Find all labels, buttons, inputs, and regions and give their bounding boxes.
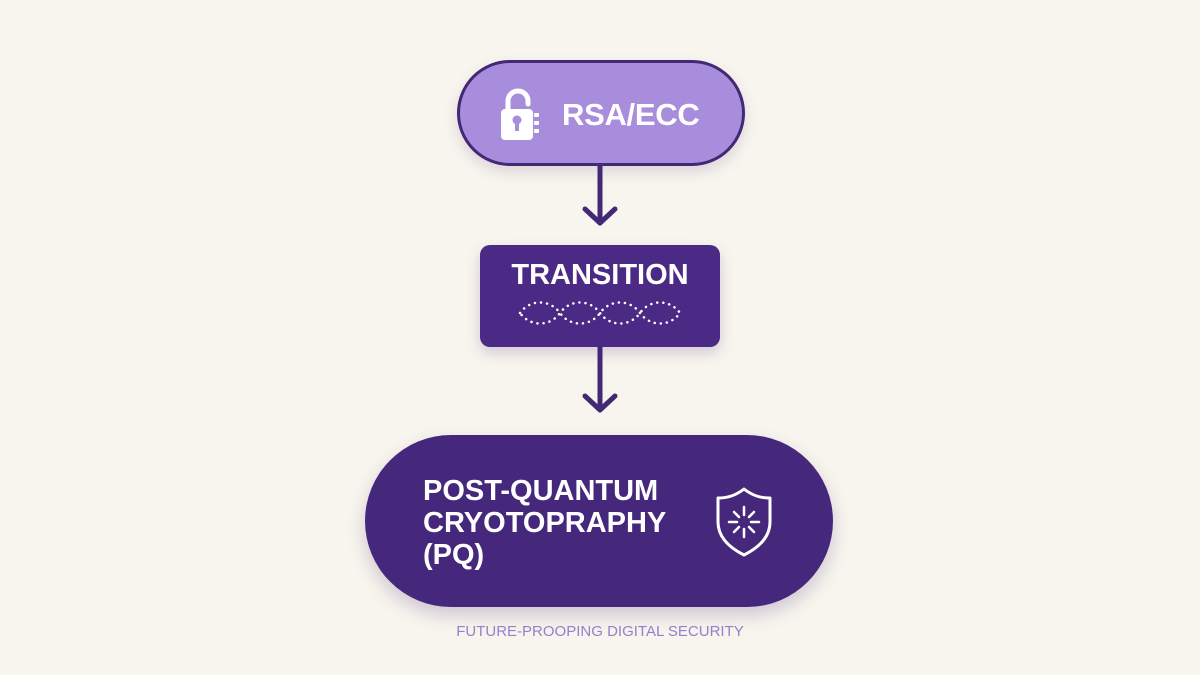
label: POST-QUANTUM CRYOTOPRAPHY (PQ): CRYOTOPRAPHY (423, 507, 666, 539)
arrow: RSA to transition (582, 166, 618, 226)
arrow: transition to PQ (582, 346, 618, 413)
label: RSA/ECC: RSA/ECC (562, 97, 699, 132)
label: POST-QUANTUM CRYOTOPRAPHY (PQ): (PQ) (423, 539, 484, 571)
icon: shield with star (716, 488, 772, 556)
label: POST-QUANTUM CRYOTOPRAPHY (PQ) (423, 475, 666, 571)
label: POST-QUANTUM CRYOTOPRAPHY (PQ): POST-QUANTUM (423, 475, 658, 507)
node: RSA/ECC (457, 60, 745, 166)
icon: dotted infinity waves (518, 301, 680, 325)
node: post-quantum cryptography (365, 435, 833, 607)
label: TRANSITION: TRANSITION (511, 259, 689, 291)
icon: open padlock (501, 88, 539, 140)
footer caption: FUTURE-PROOPING DIGITAL SECURITY (456, 623, 744, 640)
node: transition (480, 245, 720, 347)
